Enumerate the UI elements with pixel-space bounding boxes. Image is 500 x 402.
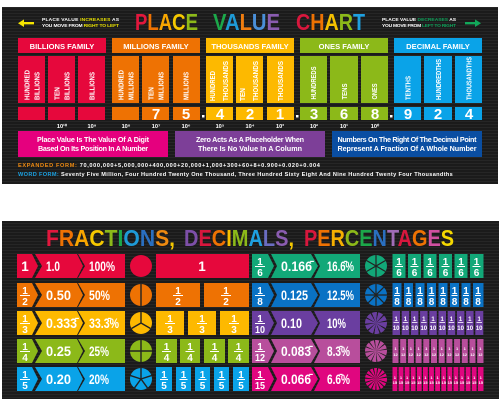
row: one tenth: 1 bbox=[468, 317, 472, 323]
decreases note: PLACE VALUE DECREASES AS bbox=[382, 17, 457, 23]
billions family: HUNDRED bbox=[24, 70, 32, 100]
row: one eighth: 8 bbox=[394, 297, 400, 308]
row: one fifteenth: 1 bbox=[418, 375, 421, 380]
row: one quarter: 1 bbox=[22, 342, 28, 353]
row: one sixth bbox=[252, 254, 484, 279]
row: one twelfth: 8.3̄% bbox=[327, 344, 350, 359]
decimal family: DECIMAL FAMILY bbox=[406, 42, 470, 51]
millions family: MILLIONS bbox=[128, 72, 136, 100]
row: one half: 1 bbox=[223, 286, 229, 297]
row: one fifth: 5 bbox=[238, 381, 244, 392]
row: one eighth: 12.5% bbox=[327, 288, 354, 303]
row: one sixth: 6 bbox=[443, 268, 449, 279]
row: one whole: 1.0 bbox=[46, 259, 60, 274]
callout: decimal point: Numbers On The Right Of The Decimal Point bbox=[338, 135, 477, 144]
row: one twelfth: 12 bbox=[255, 353, 265, 364]
row: one eighth: 1 bbox=[440, 286, 446, 297]
row: one fifth: 5 bbox=[219, 381, 225, 392]
row: one quarter: 1 bbox=[164, 342, 170, 353]
row: one tenth: 1 bbox=[257, 314, 263, 325]
row: one eighth: 8 bbox=[452, 297, 458, 308]
row: one twelfth: 1 bbox=[433, 346, 436, 351]
row: one eighth: 1 bbox=[475, 286, 481, 297]
decimal family: TENTHS bbox=[406, 76, 412, 100]
row: one fifth: 0.20 bbox=[46, 372, 71, 387]
row: one tenth: 10 bbox=[466, 326, 474, 332]
row: one sixth: 1 bbox=[257, 257, 263, 268]
row: one fifth bbox=[17, 367, 249, 392]
row: one sixth: 16.6̄% bbox=[327, 259, 354, 274]
row: one eighth bbox=[252, 283, 484, 308]
row: one quarter: 1 bbox=[212, 342, 218, 353]
row: one twelfth: 12 bbox=[478, 352, 483, 357]
row: one whole: 100% bbox=[89, 259, 115, 274]
row: one fifteenth: 1 bbox=[400, 375, 403, 380]
row: one tenth: 1 bbox=[478, 317, 482, 323]
row: one fifteenth: 15 bbox=[435, 380, 441, 385]
row: one fifteenth: 1 bbox=[480, 375, 483, 380]
millions family: MILLIONS bbox=[158, 72, 166, 100]
thousands family: 4 bbox=[216, 106, 225, 123]
row: one fifteenth: 1 bbox=[436, 375, 439, 380]
row: one twelfth: 0.083̄ bbox=[281, 344, 314, 359]
row: one fifteenth: 15 bbox=[478, 380, 484, 385]
row: one sixth: 1 bbox=[458, 257, 464, 268]
row: one whole: 1 bbox=[21, 259, 29, 274]
row: one eighth: 8 bbox=[463, 297, 469, 308]
row: one twelfth: 1 bbox=[402, 346, 405, 351]
powers of ten bbox=[57, 123, 380, 130]
row: one fifteenth: 1 bbox=[461, 375, 464, 380]
thousands family: HUNDRED bbox=[210, 71, 217, 101]
row: one fifteenth: 15 bbox=[417, 380, 422, 385]
panel: fractions decimals percentages bbox=[2, 221, 499, 399]
ones family: 6 bbox=[340, 106, 348, 123]
row: one quarter bbox=[17, 339, 249, 364]
powers of ten: 10² bbox=[310, 123, 318, 130]
row: one fifteenth: 15 bbox=[429, 380, 434, 385]
billions family: BILLIONS bbox=[64, 72, 72, 100]
row: one eighth: 8 bbox=[475, 297, 481, 308]
decimal points bbox=[202, 115, 392, 118]
row: one sixth: 1 bbox=[427, 257, 433, 268]
row: one half: 50% bbox=[89, 288, 110, 303]
row: one fifteenth: 1 bbox=[430, 375, 433, 380]
row: one quarter: 1 bbox=[187, 342, 193, 353]
increases note: PLACE VALUE INCREASES AS bbox=[42, 17, 120, 23]
billions family: TEN bbox=[54, 87, 62, 100]
row: one eighth: 1 bbox=[394, 286, 400, 297]
row: one third: 1 bbox=[231, 314, 237, 325]
row: one fifth: 1 bbox=[200, 370, 206, 381]
row: one third: 1 bbox=[199, 314, 205, 325]
row: one fifth: 20% bbox=[89, 372, 109, 387]
row: one fifteenth bbox=[252, 367, 484, 392]
row: one tenth: 10% bbox=[327, 316, 346, 331]
row: one sixth: 6 bbox=[396, 268, 402, 279]
row: one twelfth bbox=[252, 339, 484, 364]
row: one twelfth: 1 bbox=[257, 342, 263, 353]
thousands family: THOUSANDS FAMILY bbox=[211, 42, 289, 51]
row: one eighth: 8 bbox=[257, 297, 263, 308]
row: one fifteenth: 15 bbox=[460, 380, 465, 385]
row: one fifteenth: 1 bbox=[473, 375, 476, 380]
row: one tenth: 10 bbox=[411, 326, 419, 332]
row: one fifteenth: 15 bbox=[454, 380, 459, 385]
millions family: 5 bbox=[182, 106, 190, 123]
row: one third: 0.333̄ bbox=[46, 316, 80, 331]
row: one third: 33.3̄% bbox=[89, 316, 119, 331]
row: one twelfth: 1 bbox=[425, 346, 428, 351]
row: one twelfth: 1 bbox=[471, 346, 474, 351]
ones family bbox=[300, 38, 388, 123]
row: one twelfth: 1 bbox=[456, 346, 459, 351]
powers of ten: 10¹ bbox=[340, 123, 348, 130]
row: one fifth: 5 bbox=[181, 381, 187, 392]
millions family: TEN bbox=[148, 87, 156, 100]
row: one eighth: 8 bbox=[429, 297, 435, 308]
row: one twelfth: 12 bbox=[470, 352, 475, 357]
decreases note bbox=[382, 17, 457, 29]
row: one quarter: 4 bbox=[22, 353, 28, 364]
title: place value chart: CHART bbox=[296, 9, 365, 35]
title: fractions decimals percentages bbox=[46, 225, 454, 251]
ones family: ONES bbox=[372, 83, 379, 100]
title: fractions decimals percentages: FRACTIONS, bbox=[46, 225, 175, 251]
row: one tenth: 10 bbox=[255, 325, 265, 336]
millions family: MILLIONS FAMILY bbox=[123, 42, 189, 51]
row: one fifteenth: 1 bbox=[449, 375, 452, 380]
row: one twelfth: 12 bbox=[439, 352, 445, 357]
row: one half: 0.50 bbox=[46, 288, 71, 303]
callout: place value bbox=[18, 131, 168, 157]
row: one tenth: 1 bbox=[395, 317, 399, 323]
row: one fifteenth: 15 bbox=[393, 380, 398, 385]
row: one tenth: 10 bbox=[448, 326, 455, 332]
row: one fifteenth: 1 bbox=[443, 375, 446, 380]
row: one third bbox=[17, 311, 249, 336]
title: place value chart: PLACE bbox=[135, 9, 198, 35]
title: fractions decimals percentages: DECIMALS, bbox=[184, 225, 294, 251]
powers of ten: 10⁵ bbox=[216, 124, 225, 130]
callout: decimal point: Represent A Fraction Of A Whole Number bbox=[338, 144, 477, 153]
billions family: BILLIONS FAMILY bbox=[30, 42, 94, 51]
ones family: HUNDREDS bbox=[311, 66, 318, 100]
row: one sixth: 1 bbox=[443, 257, 449, 268]
row: one quarter: 4 bbox=[236, 353, 242, 364]
thousands family: TEN bbox=[240, 88, 247, 101]
row: one tenth: 1 bbox=[450, 317, 454, 323]
row: one tenth: 10 bbox=[393, 326, 400, 332]
expanded form: EXPANDED FORM: 70,000,000+5,000,000+400,000+20,000+1,000+300+60+8+0.900+0.020+0.004 bbox=[18, 163, 321, 169]
icon: yellow left arrow bbox=[18, 19, 34, 27]
thousands family: THOUSANDS bbox=[223, 61, 230, 101]
decimal family: HUNDREDTHS bbox=[436, 59, 443, 100]
row: one twelfth: 12 bbox=[447, 352, 452, 357]
ones family: 3 bbox=[310, 106, 318, 123]
row: one twelfth: 12 bbox=[424, 352, 429, 357]
title: place value chart bbox=[135, 9, 365, 35]
ones family: TENS bbox=[342, 83, 349, 100]
powers of ten: 10⁸ bbox=[122, 124, 131, 130]
row: one third: 1 bbox=[167, 314, 173, 325]
callout: place value: Based On Its Position In A Number bbox=[38, 144, 148, 153]
row: one twelfth: 12 bbox=[432, 352, 437, 357]
billions family bbox=[18, 38, 106, 120]
powers of ten: 10¹⁰ bbox=[57, 123, 68, 130]
callout: zero placeholder: There Is No Value In A Column bbox=[198, 144, 302, 153]
row: one half: 1 bbox=[22, 286, 28, 297]
row: one fifteenth: 1 bbox=[406, 375, 409, 380]
row: one quarter: 4 bbox=[164, 353, 170, 364]
billions family: BILLIONS bbox=[90, 72, 96, 100]
row: one fifth: 5 bbox=[161, 381, 167, 392]
row: one third: 3 bbox=[199, 325, 205, 336]
row: one eighth: 1 bbox=[257, 286, 263, 297]
row: one half bbox=[17, 283, 249, 308]
row: one fifteenth: 1 bbox=[412, 375, 415, 380]
row: one fifteenth: 15 bbox=[472, 380, 477, 385]
powers of ten: 10⁰ bbox=[371, 123, 380, 130]
row: one tenth bbox=[252, 311, 483, 336]
row: one third: 3 bbox=[22, 325, 28, 336]
row: one twelfth: 1 bbox=[394, 346, 397, 351]
row: one twelfth: 1 bbox=[441, 346, 444, 351]
thousands family: THOUSANDS bbox=[278, 61, 285, 101]
row: one fifth: 1 bbox=[22, 370, 28, 381]
row: one eighth: 8 bbox=[417, 297, 423, 308]
ones family: ONES FAMILY bbox=[319, 42, 369, 51]
row: one whole: 1 bbox=[198, 259, 206, 274]
row: one tenth: 1 bbox=[459, 317, 463, 323]
row: one eighth: 1 bbox=[406, 286, 412, 297]
row: one sixth: 1 bbox=[396, 257, 402, 268]
row: one eighth: 8 bbox=[440, 297, 446, 308]
row: one fifteenth: 15 bbox=[423, 380, 428, 385]
row: one twelfth: 1 bbox=[464, 346, 467, 351]
callout: zero placeholder: Zero Acts As A Placeholder When bbox=[196, 135, 304, 144]
row: one quarter: 0.25 bbox=[46, 344, 71, 359]
word form: WORD FORM: Seventy Five Million, Four Hundred Twenty One Thousand, Three Hundred Sixty Eight And Nine Hundred Twenty Four Thousandths bbox=[18, 172, 453, 178]
row: one tenth: 10 bbox=[476, 326, 483, 332]
decimal family: 4 bbox=[465, 106, 474, 123]
panel: place value chart bbox=[2, 7, 498, 184]
row: one twelfth: 12 bbox=[416, 352, 422, 357]
row: one eighth: 1 bbox=[429, 286, 435, 297]
row: one fifteenth: 1 bbox=[257, 370, 263, 381]
decimal family: THOUSANDTHS bbox=[466, 57, 474, 100]
row: one twelfth: 1 bbox=[448, 346, 451, 351]
icon: green right arrow bbox=[465, 19, 481, 27]
row: one half: 1 bbox=[175, 286, 181, 297]
callout: zero placeholder bbox=[175, 131, 325, 157]
row: one fifteenth: 1 bbox=[455, 375, 458, 380]
row: one eighth: 1 bbox=[463, 286, 469, 297]
row: one sixth: 1 bbox=[412, 257, 418, 268]
row: one twelfth: 1 bbox=[417, 346, 420, 351]
decimal family: 9 bbox=[404, 106, 412, 123]
ones family: 8 bbox=[371, 106, 379, 123]
millions family: HUNDRED bbox=[118, 70, 126, 100]
powers of ten: 10⁹ bbox=[88, 124, 97, 130]
row: one quarter: 4 bbox=[187, 353, 193, 364]
row: one sixth: 6 bbox=[257, 268, 263, 279]
row: one fifteenth: 15 bbox=[441, 380, 447, 385]
callout: decimal point bbox=[332, 131, 482, 157]
powers of ten: 10³ bbox=[276, 123, 284, 130]
row: one quarter: 25% bbox=[89, 344, 109, 359]
row: one sixth: 6 bbox=[458, 268, 464, 279]
row: one tenth: 1 bbox=[413, 317, 417, 323]
millions family bbox=[112, 38, 200, 123]
row: one fifteenth: 1 bbox=[394, 375, 397, 380]
billions family: BILLIONS bbox=[34, 72, 42, 100]
thousands family: 2 bbox=[246, 106, 254, 123]
decimal family: 2 bbox=[434, 106, 442, 123]
row: one twelfth: 12 bbox=[463, 352, 468, 357]
row: one tenth: 10 bbox=[439, 326, 446, 332]
row: one tenth: 10 bbox=[402, 326, 409, 332]
row: one quarter: 4 bbox=[212, 353, 218, 364]
row: one tenth: 10 bbox=[420, 326, 428, 332]
row: one third: 1 bbox=[22, 314, 28, 325]
row: one twelfth: 1 bbox=[479, 346, 482, 351]
decimal family bbox=[394, 38, 482, 123]
row: one fifth: 1 bbox=[181, 370, 187, 381]
row: one third: 3 bbox=[231, 325, 237, 336]
row: one fifteenth: 1 bbox=[424, 375, 427, 380]
row: one quarter: 1 bbox=[236, 342, 242, 353]
row: one fifteenth: 6.6̄% bbox=[327, 372, 350, 387]
row: one fifteenth: 15 bbox=[255, 381, 265, 392]
title: place value chart: VALUE bbox=[213, 9, 280, 35]
row: one tenth: 1 bbox=[422, 317, 426, 323]
row: one fifteenth: 15 bbox=[466, 380, 471, 385]
row: one fifteenth: 15 bbox=[405, 380, 410, 385]
row: one tenth: 1 bbox=[431, 317, 435, 323]
decreases note: YOU MOVE FROM LEFT TO RIGHT bbox=[382, 23, 456, 29]
thousands family: THOUSANDS bbox=[253, 61, 260, 101]
row: one eighth: 1 bbox=[417, 286, 423, 297]
powers of ten: 10⁷ bbox=[152, 124, 161, 130]
row: one eighth: 8 bbox=[406, 297, 412, 308]
row: one tenth: 10 bbox=[457, 326, 465, 332]
row: one sixth: 6 bbox=[412, 268, 418, 279]
row: one twelfth: 12 bbox=[455, 352, 460, 357]
row: one half: 2 bbox=[22, 297, 28, 308]
increases note bbox=[42, 17, 120, 29]
row: one sixth: 1 bbox=[474, 257, 480, 268]
row: one fifteenth: 15 bbox=[448, 380, 453, 385]
millions family: MILLIONS bbox=[184, 72, 190, 100]
row: one fifth: 1 bbox=[161, 370, 167, 381]
row: one fifteenth: 15 bbox=[399, 380, 404, 385]
row: one fifth: 1 bbox=[238, 370, 244, 381]
row: one third: 3 bbox=[167, 325, 173, 336]
row: one fifteenth: 15 bbox=[411, 380, 416, 385]
row: one tenth: 1 bbox=[404, 317, 408, 323]
row: one fifth: 5 bbox=[22, 381, 28, 392]
powers of ten: 10⁴ bbox=[246, 124, 255, 130]
millions family: 7 bbox=[152, 106, 160, 123]
row: one eighth: 1 bbox=[452, 286, 458, 297]
powers of ten: 10⁶ bbox=[182, 124, 191, 130]
thousands family: 1 bbox=[276, 106, 284, 123]
title: fractions decimals percentages: PERCENTAGES bbox=[304, 225, 454, 251]
row: one twelfth: 1 bbox=[410, 346, 413, 351]
row: one fifth: 5 bbox=[200, 381, 206, 392]
row: one fifth: 1 bbox=[219, 370, 225, 381]
row: one whole bbox=[17, 254, 249, 278]
row: one half: 2 bbox=[175, 297, 181, 308]
row: one tenth: 10 bbox=[430, 326, 437, 332]
row: one half: 2 bbox=[223, 297, 229, 308]
callout: place value: Place Value Is The Value Of A Digit bbox=[37, 135, 150, 144]
row: one twelfth: 12 bbox=[393, 352, 398, 357]
row: one tenth: 0.10 bbox=[281, 316, 302, 331]
row: one twelfth: 12 bbox=[409, 352, 414, 357]
thousands family bbox=[206, 38, 294, 123]
row: one sixth: 6 bbox=[427, 268, 433, 279]
row: one fifteenth: 1 bbox=[467, 375, 470, 380]
row: one sixth: 0.166̄ bbox=[281, 259, 315, 274]
row: one twelfth: 12 bbox=[401, 352, 406, 357]
row: one fifteenth: 0.066̄ bbox=[281, 372, 314, 387]
increases note: YOU MOVE FROM RIGHT TO LEFT bbox=[42, 23, 119, 29]
row: one tenth: 1 bbox=[441, 317, 445, 323]
row: one sixth: 6 bbox=[474, 268, 480, 279]
row: one eighth: 0.125 bbox=[281, 288, 308, 303]
